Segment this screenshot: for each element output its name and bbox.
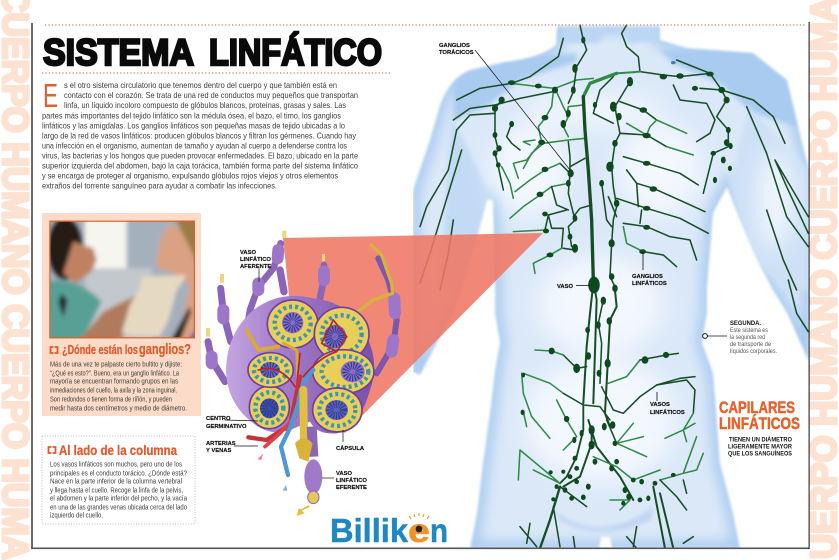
callout: capilares linfaticos: LIGERAMENTE MAYOR [728, 444, 792, 450]
label: vaso linfatico aferente: VASO [240, 250, 256, 256]
label: vaso linfatico eferente: VASO [336, 471, 352, 477]
label: ganglios toracicos: TORÁCICOS [439, 49, 474, 56]
intro paragraph: largo de la red de vasos linfáticos: producen glóbulos blancos y filtran los gérmenes. Cuando hay [42, 132, 357, 140]
intro paragraph: partes más importantes del tejido linfático son la médula ósea, el bazo, el timo, los ganglios [42, 112, 341, 120]
label: vasos linfaticos: LINFÁTICOS [650, 409, 685, 416]
callout: capilares linfaticos: CAPILARES [719, 398, 795, 417]
text block: columna: Nace en la parte inferior de la columna vertebral [50, 476, 182, 486]
text block: columna: izquierdo del cuello. [50, 510, 103, 520]
panel: al lado de la columna [42, 436, 195, 524]
afferent vessels [208, 243, 397, 382]
panel: ganglios [42, 213, 201, 416]
label: ganglios linfaticos [632, 252, 667, 287]
callout: segunda: SEGUNDA. [730, 320, 761, 327]
label: centro germinativo: CENTRO [206, 416, 231, 422]
text block: columna [50, 460, 188, 520]
callout: segunda [703, 320, 777, 355]
intro paragraph: linfáticos y las amígdalas. Los ganglios linfáticos son pequeñas masas de tejido ubicadas a lo [42, 122, 345, 130]
callout: segunda: de transporte de [730, 341, 772, 348]
label: vaso [557, 284, 590, 290]
illustration: human torso [413, 20, 809, 548]
label: vaso linfatico aferente [240, 250, 271, 282]
intro paragraph: superior izquierda del abdomen, bajo la caja torácica, también forma parte del sistema linfático [42, 162, 358, 170]
label: arterias y venas: ARTERIAS [206, 441, 236, 447]
title [43, 32, 382, 73]
magnification cone: red wedge [283, 233, 543, 433]
callout: capilares linfaticos: TIENEN UN DIÁMETRO [729, 434, 792, 444]
label: centro germinativo: GERMINATIVO [206, 424, 247, 430]
heading: donde estan los ganglios: ¿Dónde están los [62, 343, 138, 357]
callout: capilares linfaticos [719, 398, 800, 458]
drop cap: E [43, 77, 58, 114]
label: vaso linfatico eferente [322, 471, 367, 491]
text block: ganglios [50, 360, 187, 412]
text block: columna: el abdomen y la parte inferior del pecho, y la vacía [50, 494, 188, 502]
intro paragraph [42, 77, 358, 190]
label: vaso: VASO [557, 284, 573, 290]
photo: doctor examining neck [49, 220, 195, 338]
lymphatic network: upper body [420, 25, 808, 290]
heading: donde estan los ganglios: ganglios? [139, 342, 191, 358]
text block: ganglios: Son redondos o tienen forma de riñón, y pueden [50, 394, 172, 404]
yellow lymph vessel branch [347, 244, 393, 320]
label: vaso linfatico eferente: EFERENTE [336, 485, 367, 491]
heading: al lado de la columna: Al lado de la columna [59, 442, 177, 458]
text block: columna: Los vasos linfáticos son muchos, pero uno de los [50, 460, 182, 468]
text block: columna: principales es el conducto torácico. ¿Dónde está? [50, 468, 187, 478]
label: vasos linfaticos: VASOS [650, 402, 670, 408]
blood vessels [247, 320, 347, 475]
dotted rule under title [42, 72, 392, 74]
text block: ganglios: “¿Qué es esto?”. Bueno, era un ganglio linfático. La [50, 368, 180, 378]
intro paragraph: y se encarga de proteger al organismo, expulsando glóbulos rojos viejos y otros elementos [42, 172, 338, 180]
intro paragraph: s el otro sistema circulatorio que tenemos dentro del cuerpo y que también está en [64, 81, 337, 90]
label: arterias y venas: Y VENAS [206, 448, 231, 454]
logo: Billiken: e [408, 512, 430, 549]
logo: Billiken: Billik [330, 512, 409, 549]
text block: ganglios: medir hasta dos centímetros y medio de diámetro. [50, 404, 187, 412]
lobes [248, 300, 374, 432]
dotted rule top [45, 24, 805, 26]
label: capsula [336, 430, 365, 452]
callout: segunda: Este sistema es [730, 327, 768, 334]
callout: capilares linfaticos: QUE LOS SANGUÍNEOS [728, 448, 793, 458]
label: ganglios linfaticos: GANGLIOS [632, 274, 663, 280]
label: centro germinativo [206, 416, 258, 430]
intro paragraph: una infección en el organismo, aumentan de tamaño y ayudan al cuerpo a defenderse contra los [42, 142, 347, 150]
icon: bracket marker [50, 347, 58, 353]
illustration: lymph node [206, 231, 397, 516]
capsule [226, 296, 374, 433]
label: capsula: CÁPSULA [336, 445, 365, 452]
logo: Billiken [330, 512, 448, 549]
text block: ganglios: Más de una vez te palpaste cierto bultito y dijiste: [50, 360, 182, 368]
efferent vessel [295, 427, 322, 504]
text block: columna: en una de las grandes venas ubicada cerca del lado [50, 502, 187, 512]
arrows: flow out [257, 453, 310, 516]
text block: columna: y llega hasta el cuello. Recoge la linfa de la pelvis, [50, 486, 183, 494]
intro paragraph: contacto con el corazón. Se trata de una red de conductos muy pequeños que transportan [64, 91, 358, 100]
label: vaso linfatico aferente: AFERENTE [240, 264, 271, 270]
callout: segunda: la segunda red [730, 334, 765, 341]
logo: Billiken: n [430, 512, 448, 549]
label: ganglios toracicos: GANGLIOS [439, 43, 470, 49]
text block: ganglios: mayoría se encuentran formando grupos en las [50, 376, 178, 386]
intro paragraph: virus, las bacterias y los hongos que pueden provocar enfermedades. El bazo, ubicado en la parte [42, 152, 358, 160]
label: vaso linfatico eferente: LINFÁTICO [336, 477, 367, 484]
text block: ganglios: inmediaciones del cuello, la axila y la zona inguinal. [50, 386, 177, 394]
arrows: lymph flow in [206, 231, 325, 337]
label: vaso linfatico aferente: LINFÁTICO [240, 256, 271, 263]
label: vasos linfaticos [650, 392, 685, 416]
label: arterias y venas [206, 441, 258, 454]
lymphatic network: lower body [518, 277, 808, 548]
icon: eye and rays [409, 513, 429, 532]
callout: segunda: líquidos corporales. [730, 348, 777, 355]
title: SISTEMA [43, 32, 194, 73]
icon: bracket marker [48, 447, 56, 453]
label: ganglios toracicos [439, 43, 570, 170]
label: ganglios linfaticos: LINFÁTICOS [632, 280, 667, 287]
callout: capilares linfaticos: LINFÁTICOS [719, 414, 800, 433]
title: LINFÁTICO [209, 32, 382, 73]
intro paragraph: linfa, un líquido incoloro compuesto de glóbulos blancos, proteínas, grasas y sales. Las [64, 101, 346, 110]
intro paragraph: extraños del torrente sanguíneo para ayudar a combatir las infecciones. [42, 182, 277, 190]
